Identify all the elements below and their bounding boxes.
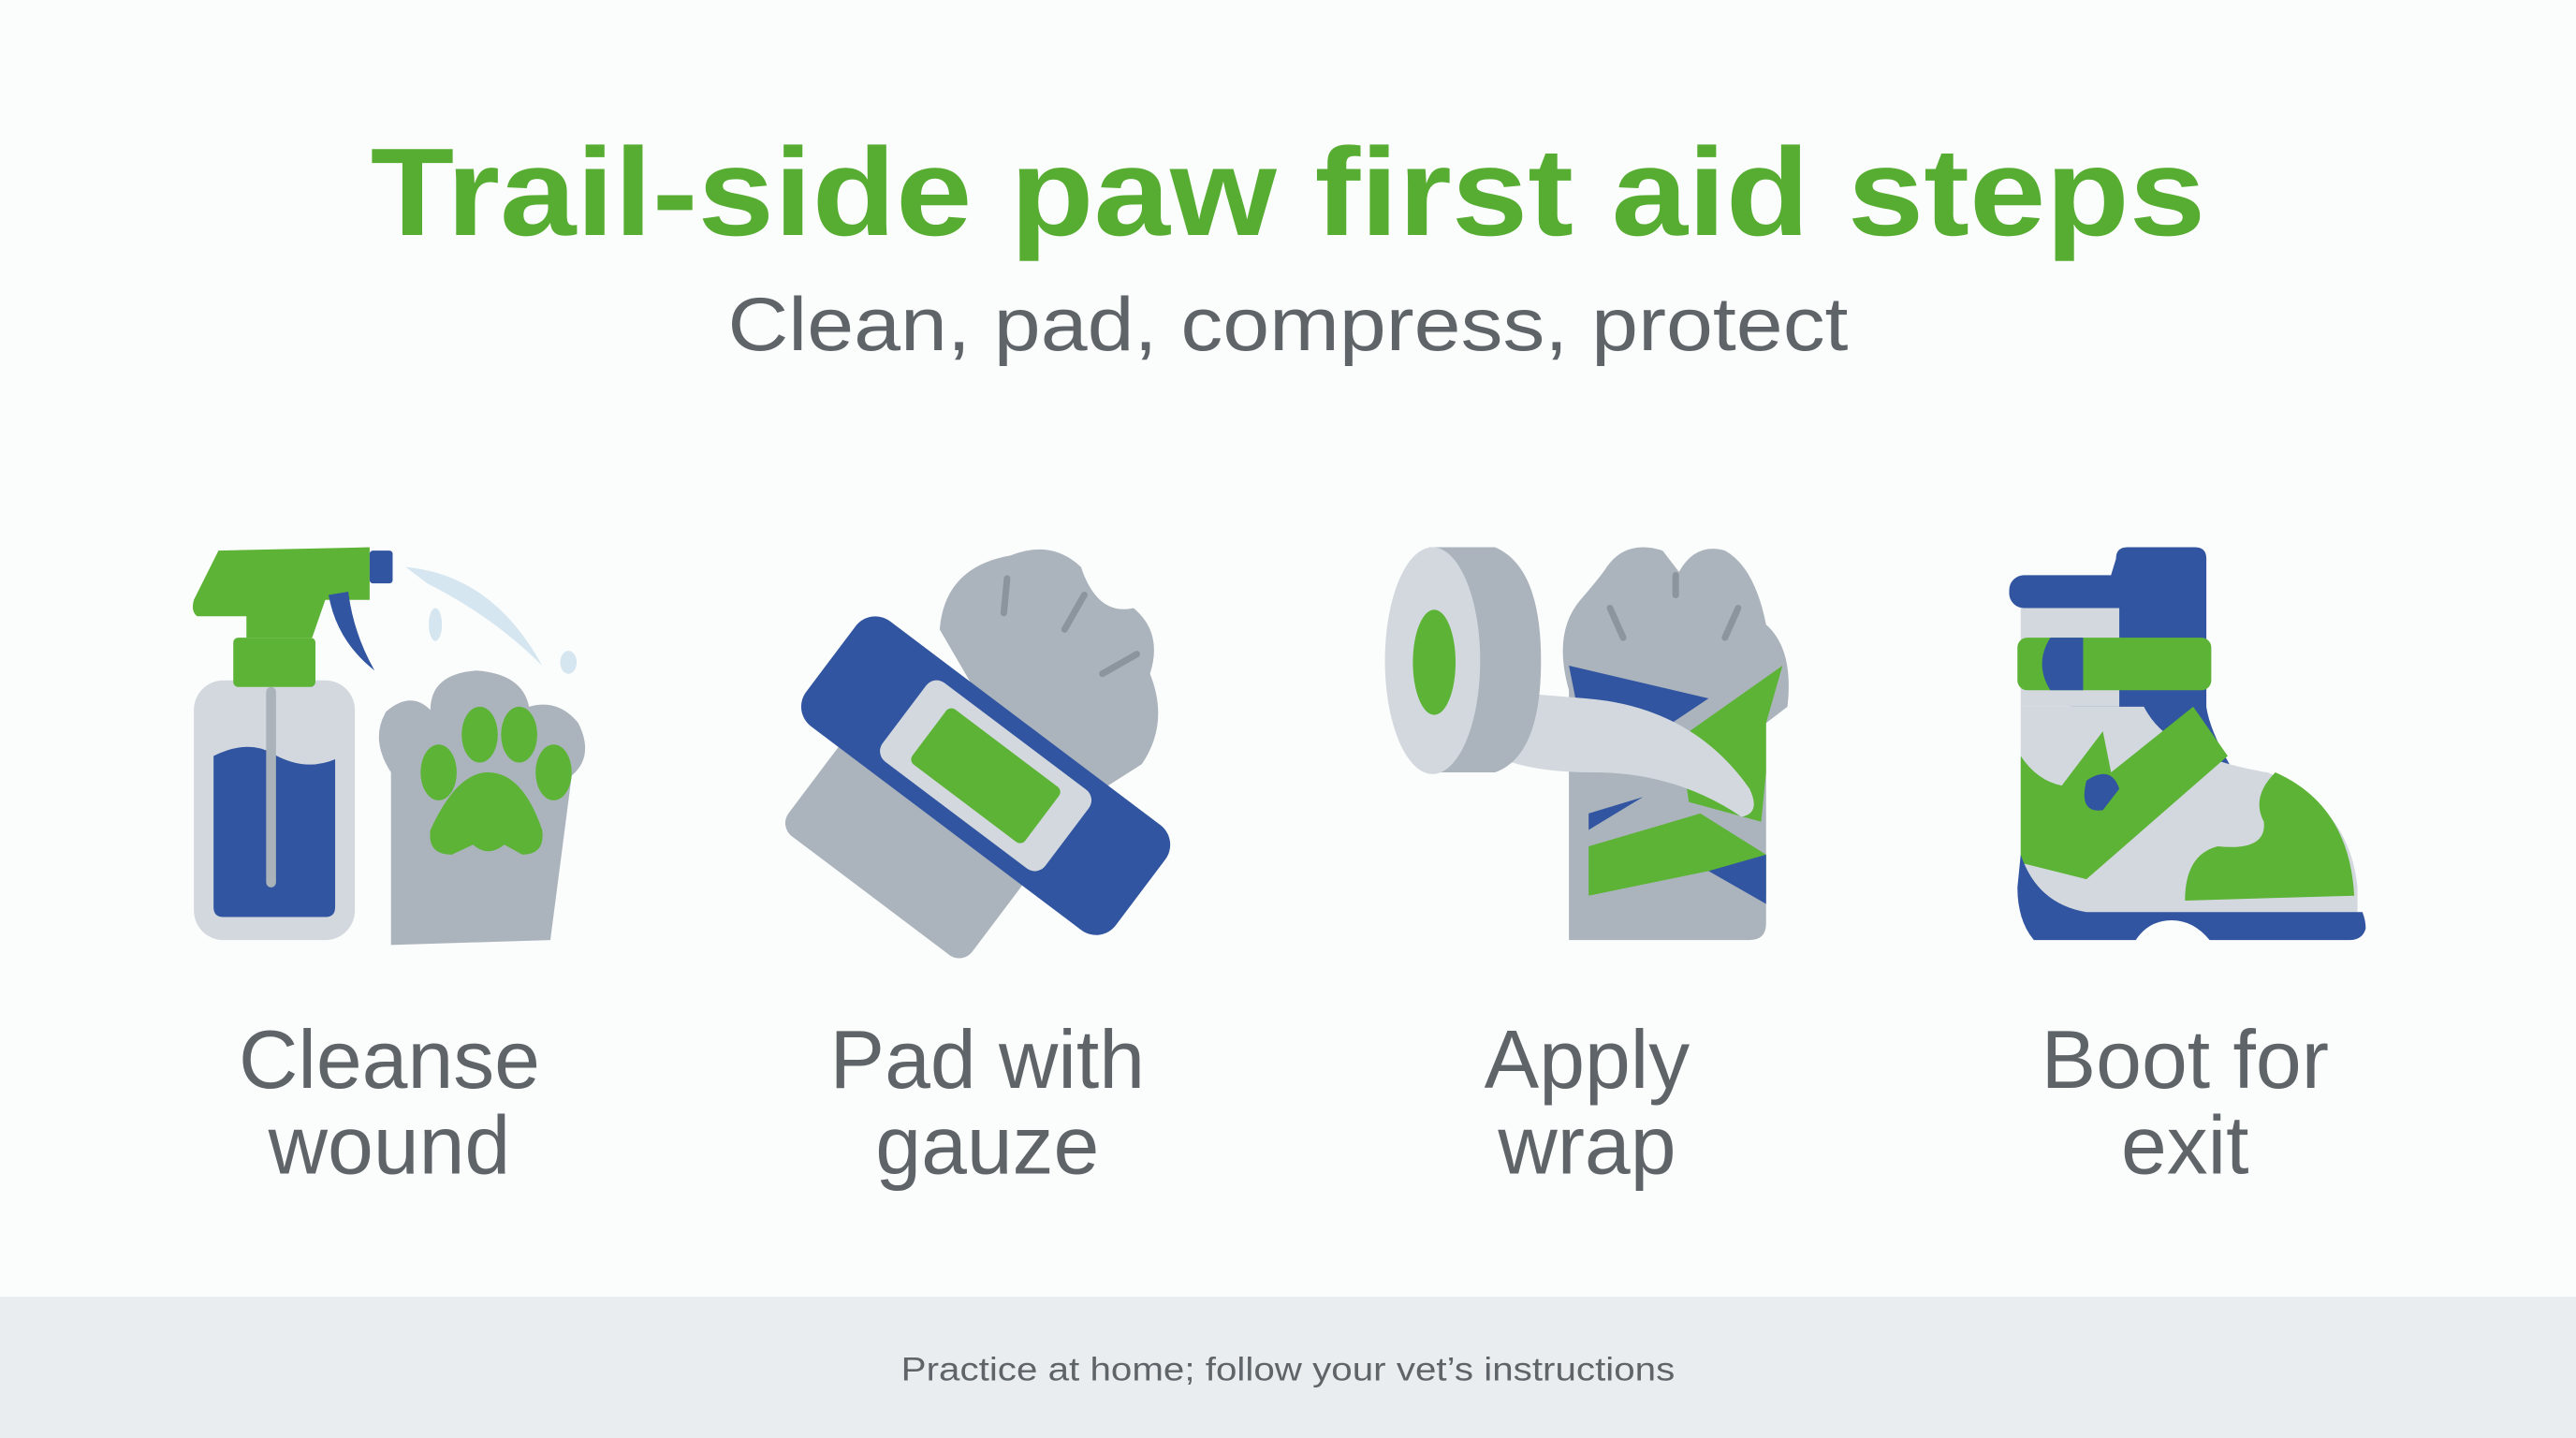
label: boot for exit: Boot for	[2042, 1014, 2329, 1106]
label: pad with gauze: gauze	[875, 1099, 1099, 1191]
subtitle: Clean, pad, compress, protect	[728, 283, 1848, 367]
icon: wrap roll and paw	[1385, 547, 1789, 940]
title: Trail-side paw first aid steps	[371, 123, 2205, 262]
footer band	[0, 1297, 2576, 1438]
label: apply wrap: Apply	[1485, 1014, 1690, 1106]
label: apply wrap: wrap	[1497, 1099, 1676, 1191]
label: pad with gauze: Pad with	[830, 1014, 1145, 1106]
icon: boot	[2009, 548, 2365, 940]
label: boot for exit: exit	[2121, 1099, 2249, 1191]
label: cleanse wound: wound	[268, 1099, 510, 1191]
label: cleanse wound: Cleanse	[239, 1014, 540, 1106]
footer note: Practice at home; follow your vet’s instructions	[901, 1352, 1675, 1388]
icon: spray bottle and paw	[193, 548, 585, 945]
icon: paw with gauze pad	[779, 550, 1180, 965]
